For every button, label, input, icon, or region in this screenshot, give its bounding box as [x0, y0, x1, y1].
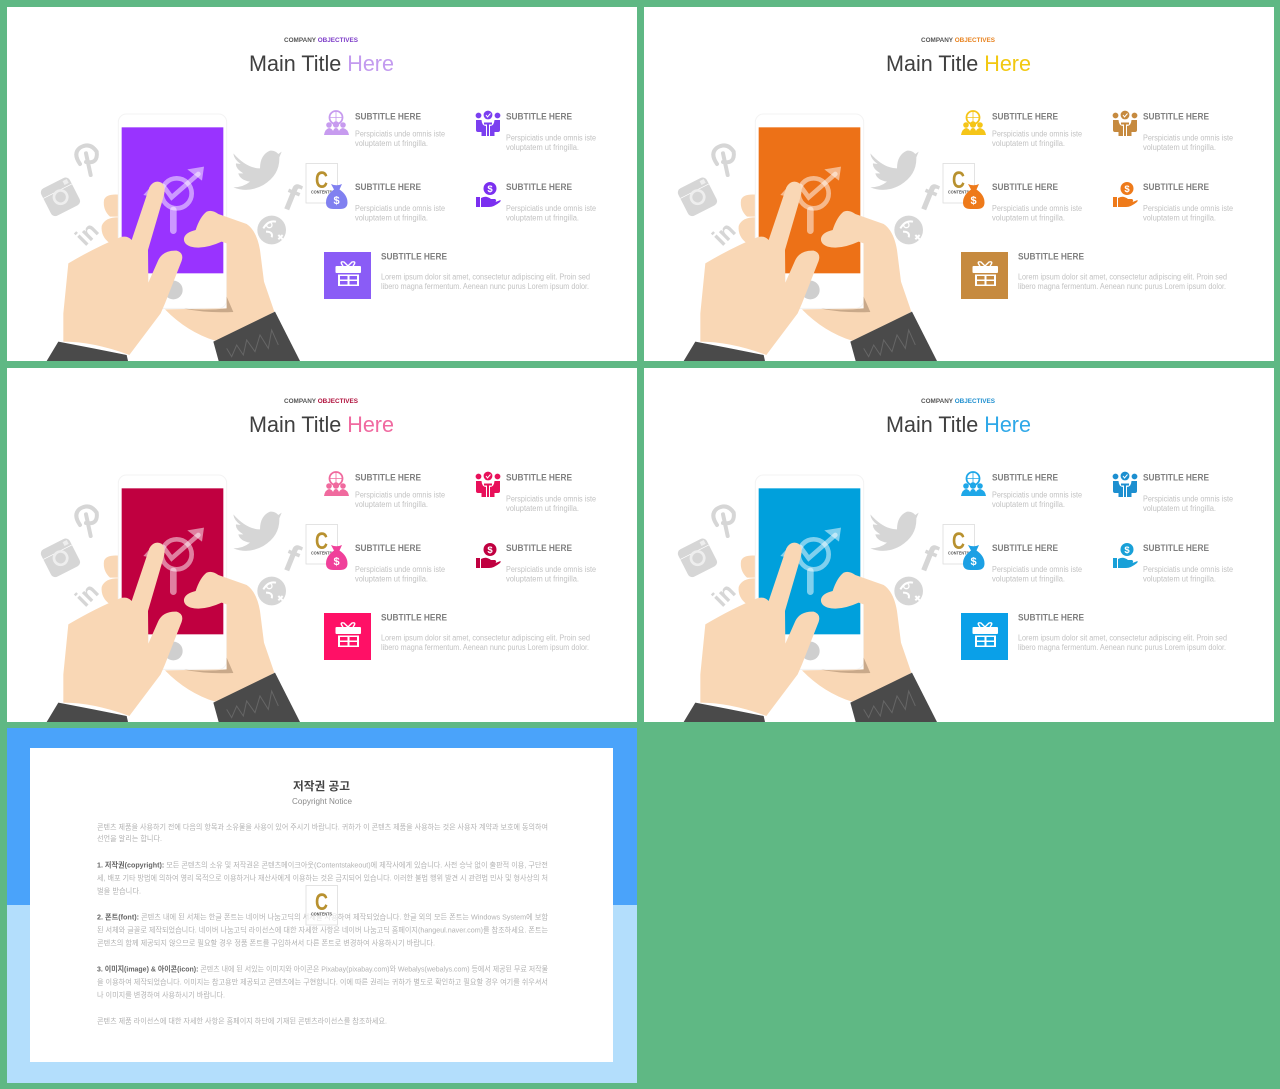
icon: linkedin: in	[70, 217, 104, 251]
logo watermark: CONTENTS	[311, 550, 332, 556]
subtitle item 4: Perspiciatis unde omnis iste	[1143, 204, 1233, 213]
subtitle item 4: voluptatem ut fringilla.	[1143, 574, 1216, 584]
icon: twitter	[233, 151, 282, 190]
icon: team	[1113, 111, 1137, 136]
icon: google plus	[894, 577, 923, 605]
text block: image and icon	[97, 964, 548, 1000]
subtitle item 2: Perspiciatis unde omnis iste	[506, 134, 596, 142]
icon: gift square	[961, 252, 1008, 299]
subtitle item 1: Perspiciatis unde omnis iste	[992, 490, 1082, 500]
subtitle item 5: Lorem ipsum dolor sit amet, consectetur adipiscing elit. Proin sed	[381, 272, 590, 282]
subtitle item 2: SUBTITLE HERE	[506, 112, 572, 122]
icon: gift square	[961, 613, 1008, 660]
icon: team	[476, 472, 500, 497]
icon: linkedin: in	[707, 217, 741, 251]
subtitle item 3: SUBTITLE HERE	[992, 182, 1058, 193]
subtitle item 5: libero magna fermentum. Aenean nunc purus Lorem ipsum dolor.	[381, 282, 589, 291]
heading: copyright notice korean: 저작권 공고	[293, 779, 350, 793]
logo watermark: C	[315, 889, 328, 916]
subtitle item 4: voluptatem ut fringilla.	[1143, 214, 1216, 222]
icon: linkedin: in	[70, 578, 104, 612]
icon: hand with coin	[476, 543, 501, 568]
subtitle item 1	[992, 472, 1082, 509]
icon: money bag: $	[333, 556, 340, 568]
subtitle item 3: Perspiciatis unde omnis iste	[992, 565, 1082, 574]
logo watermark: C	[315, 528, 328, 555]
subtitle item 3	[355, 182, 445, 222]
icon: pinterest	[76, 506, 97, 536]
icon: money bag: $	[333, 195, 340, 207]
subtitle item 5	[381, 612, 590, 652]
illustration: phone	[102, 114, 227, 308]
eyebrow: company objectives: COMPANY OBJECTIVES	[921, 398, 996, 405]
subtitle item 4: Perspiciatis unde omnis iste	[1143, 565, 1233, 574]
icon: money bag: $	[970, 556, 977, 568]
text block: font	[97, 912, 548, 948]
subtitle item 1: SUBTITLE HERE	[355, 472, 421, 484]
subtitle item 1	[992, 112, 1082, 148]
subtitle item 3: SUBTITLE HERE	[992, 543, 1058, 554]
icon: gift square	[324, 252, 371, 299]
subtitle item 2: Perspiciatis unde omnis iste	[506, 494, 596, 504]
illustration: phone	[102, 475, 227, 669]
text block: image and icon: 을 이용하여 제작되었습니다. 이미지는 참고용만 제공되고 콘텐츠에는 구현합니다. 이에 따른 권리는 귀하가 별도로 확인하고 필요할 경우 여기를 쉬우셔서	[97, 976, 548, 986]
subtitle item 1: Perspiciatis unde omnis iste	[355, 130, 445, 138]
subtitle item 5: Lorem ipsum dolor sit amet, consectetur adipiscing elit. Proin sed	[381, 634, 590, 642]
subtitle item 5	[1018, 252, 1227, 291]
icon: people globe	[961, 472, 986, 496]
subtitle item 5: Lorem ipsum dolor sit amet, consectetur adipiscing elit. Proin sed	[1018, 634, 1227, 642]
subtitle item 4	[1143, 543, 1234, 584]
subtitle item 4	[506, 543, 596, 584]
icon: facebook: f	[915, 537, 942, 581]
illustration: hands	[47, 543, 300, 722]
logo watermark	[306, 886, 338, 925]
logo watermark: CONTENTS	[311, 190, 332, 194]
subtitle item 5	[1018, 612, 1227, 652]
illustration: hands	[47, 182, 300, 361]
subtitle item 2: voluptatem ut fringilla.	[1143, 143, 1216, 152]
subtitle item 4: voluptatem ut fringilla.	[506, 574, 579, 584]
subtitle item 3: Perspiciatis unde omnis iste	[992, 204, 1082, 213]
subtitle item 1: SUBTITLE HERE	[992, 472, 1058, 484]
subtitle item 5: SUBTITLE HERE	[381, 252, 447, 262]
eyebrow: company objectives: COMPANY OBJECTIVES	[921, 37, 996, 44]
text block: intro: 콘텐츠 제품을 사용하기 전에 다음의 항목과 소유물을 사용이 있어 주시기 바랍니다. 귀하가 이 콘텐츠 제품을 사용하는 것은 사용자 계약과 보호에 동의하여	[97, 822, 548, 832]
eyebrow: company objectives: COMPANY OBJECTIVES	[284, 37, 359, 44]
subtitle item 3: voluptatem ut fringilla.	[355, 574, 428, 584]
icon: pinterest	[76, 145, 97, 175]
subtitle item 2: Perspiciatis unde omnis iste	[1143, 134, 1233, 142]
icon: hand with coin: $	[487, 184, 493, 195]
subtitle item 2: Perspiciatis unde omnis iste	[1143, 494, 1233, 504]
icon: hand with coin	[1113, 543, 1138, 568]
title: Main Title Here	[249, 51, 394, 76]
subtitle item 1: voluptatem ut fringilla.	[355, 500, 428, 509]
icon: instagram	[676, 176, 719, 218]
logo watermark: CONTENTS	[948, 550, 969, 556]
illustration: phone	[739, 114, 864, 308]
icon: people globe	[324, 472, 349, 496]
subtitle item 2	[506, 112, 596, 152]
icon: linkedin: in	[707, 578, 741, 612]
subtitle item 2	[1143, 112, 1234, 152]
text block: copyright: 세, 배포 기타 방법에 의하여 영리 목적으로 이용하거나 재산사에게 이용하는 것은 금지되어 있습니다. 이러한 불법 행위 발견 시 관련법 민사 및 형사상의 처	[97, 872, 548, 882]
panel: crimson slide	[7, 368, 637, 722]
icon: facebook: f	[278, 537, 305, 581]
text block: copyright	[97, 860, 548, 896]
subtitle item 2: SUBTITLE HERE	[1143, 112, 1209, 122]
subtitle item 2: SUBTITLE HERE	[1143, 472, 1209, 484]
title: Main Title Here	[249, 412, 394, 437]
subtitle item 4: SUBTITLE HERE	[506, 182, 572, 193]
subtitle item 5: Lorem ipsum dolor sit amet, consectetur adipiscing elit. Proin sed	[1018, 272, 1227, 282]
subtitle item 1: voluptatem ut fringilla.	[355, 139, 428, 148]
subtitle item 3	[992, 182, 1082, 222]
icon: facebook: f	[915, 176, 942, 220]
subtitle item 3: voluptatem ut fringilla.	[355, 214, 428, 222]
panel: blue slide	[644, 368, 1274, 722]
title: Main Title Here	[886, 412, 1031, 437]
subtitle item 5: libero magna fermentum. Aenean nunc purus Lorem ipsum dolor.	[381, 643, 589, 652]
icon: hand with coin: $	[1124, 545, 1130, 556]
icon: money bag	[326, 545, 348, 570]
subtitle item 5: libero magna fermentum. Aenean nunc purus Lorem ipsum dolor.	[1018, 282, 1226, 291]
subtitle item 1: SUBTITLE HERE	[355, 112, 421, 122]
text block: font: 2. 폰트(font): 콘텐츠 내에 된 서체는 한글 폰트는 네이버 나눔고딕의 서체를 사용하여 제작되었습니다. 한글 외의 모든 폰트는 Windows System에 보함	[97, 912, 548, 922]
icon: pinterest	[713, 145, 734, 175]
text block: image and icon: 나 이미지를 변경하여 사용하시기 바랍니다.	[97, 990, 225, 1000]
logo watermark	[306, 524, 338, 564]
subtitle item 1: SUBTITLE HERE	[992, 112, 1058, 122]
icon: people globe	[324, 111, 349, 135]
subtitle item 1: voluptatem ut fringilla.	[992, 139, 1065, 148]
icon: twitter	[233, 512, 282, 551]
subtitle item 2: voluptatem ut fringilla.	[1143, 504, 1216, 513]
icon: money bag	[963, 184, 984, 209]
icon: google plus	[257, 216, 286, 244]
subtitle item 2	[1143, 472, 1234, 513]
panel: copyright notice	[7, 728, 637, 1083]
subtitle item 1: Perspiciatis unde omnis iste	[992, 130, 1082, 138]
illustration: hands	[684, 543, 937, 722]
subheading: copyright notice: Copyright Notice	[292, 797, 353, 806]
subtitle item 3: SUBTITLE HERE	[355, 182, 421, 193]
text block: copyright: 벌을 받습니다.	[97, 886, 141, 896]
logo watermark	[306, 164, 338, 203]
icon: team	[1113, 472, 1137, 497]
subtitle item 3: Perspiciatis unde omnis iste	[355, 565, 445, 574]
icon: twitter	[870, 151, 919, 190]
icon: google plus	[894, 216, 923, 244]
subtitle item 4: voluptatem ut fringilla.	[506, 214, 579, 222]
subtitle item 4: SUBTITLE HERE	[506, 543, 572, 554]
subtitle item 5: SUBTITLE HERE	[1018, 612, 1084, 624]
subtitle item 3	[992, 543, 1082, 584]
icon: instagram	[676, 537, 719, 579]
subtitle item 2: voluptatem ut fringilla.	[506, 143, 579, 152]
subtitle item 2	[506, 472, 596, 513]
text block: image and icon: 3. 이미지(image) & 아이콘(icon): 콘텐츠 내에 된 서있는 이미지와 아이콘은 Pixabay(pixabay.com)와 Webalys(webalys.com) 등에서 제공된 무료 저작물	[97, 964, 548, 974]
icon: hand with coin: $	[487, 545, 493, 556]
icon: google plus	[257, 577, 286, 605]
subtitle item 3: voluptatem ut fringilla.	[992, 214, 1065, 222]
icon: hand with coin	[476, 182, 501, 207]
eyebrow: company objectives: COMPANY OBJECTIVES	[284, 398, 359, 405]
subtitle item 1: voluptatem ut fringilla.	[992, 500, 1065, 509]
illustration: hands	[684, 182, 937, 361]
subtitle item 5	[381, 252, 590, 291]
subtitle item 5: SUBTITLE HERE	[381, 612, 447, 624]
icon: money bag: $	[970, 195, 977, 207]
icon: instagram	[39, 537, 82, 579]
icon: people globe	[961, 111, 986, 135]
subtitle item 5: SUBTITLE HERE	[1018, 252, 1084, 262]
text block: copyright: 1. 저작권(copyright): 모든 콘텐츠의 소유 및 저작권은 콘텐츠메이크아웃(Contentstakeout)에 제작사에게 있습니다. 사전 승낙 없이 출판적 이용, 구단전	[97, 860, 548, 870]
icon: hand with coin: $	[1124, 184, 1130, 195]
panel: purple slide	[7, 7, 637, 361]
icon: twitter	[870, 512, 919, 551]
logo watermark	[943, 164, 974, 203]
subtitle item 1: Perspiciatis unde omnis iste	[355, 490, 445, 500]
logo watermark: CONTENTS	[311, 912, 332, 916]
icon: hand with coin	[1113, 182, 1138, 207]
subtitle item 4: Perspiciatis unde omnis iste	[506, 565, 596, 574]
subtitle item 1	[355, 112, 445, 148]
subtitle item 1	[355, 472, 445, 509]
subtitle item 4	[506, 182, 596, 222]
subtitle item 4	[1143, 182, 1234, 222]
subtitle item 4: SUBTITLE HERE	[1143, 182, 1209, 193]
subtitle item 2: SUBTITLE HERE	[506, 472, 572, 484]
logo watermark: C	[952, 528, 965, 555]
subtitle item 3: Perspiciatis unde omnis iste	[355, 204, 445, 213]
text block: font: 된 서체와 글꼴로 제작되었습니다. 네이버 나눔고딕 라이선스에 대한 자세한 사항은 네이버 나눔고딕 홈페이지(hangeul.naver.com)를 참조하세요. 폰트는	[97, 924, 548, 934]
icon: instagram	[39, 176, 82, 218]
text block: intro	[97, 822, 548, 843]
subtitle item 3	[355, 543, 445, 584]
icon: facebook: f	[278, 176, 305, 220]
subtitle item 5: libero magna fermentum. Aenean nunc purus Lorem ipsum dolor.	[1018, 643, 1226, 652]
text block: license note: 콘텐츠 제품 라이선스에 대한 자세한 사항은 홈페이지 하단에 기재된 콘텐츠라이선스를 참조하세요.	[97, 1016, 387, 1026]
text block: font: 콘텐츠의 함께 제공되지 않으므로 필요할 경우 정품 폰트를 구입하셔서 다른 폰트로 변경하여 사용하시기 바랍니다.	[97, 938, 435, 948]
icon: gift square	[324, 613, 371, 660]
title: Main Title Here	[886, 51, 1031, 76]
subtitle item 2: voluptatem ut fringilla.	[506, 504, 579, 513]
icon: pinterest	[713, 506, 734, 536]
logo watermark: C	[952, 167, 965, 194]
logo watermark: C	[315, 167, 328, 194]
text block: intro: 선언을 알리는 합니다.	[97, 833, 162, 843]
panel: orange slide	[644, 7, 1274, 361]
illustration: phone	[739, 475, 864, 669]
subtitle item 4: SUBTITLE HERE	[1143, 543, 1209, 554]
icon: money bag	[326, 184, 348, 209]
subtitle item 3: voluptatem ut fringilla.	[992, 574, 1065, 584]
logo watermark: CONTENTS	[948, 190, 969, 194]
subtitle item 4: Perspiciatis unde omnis iste	[506, 204, 596, 213]
logo watermark	[943, 524, 974, 564]
subtitle item 3: SUBTITLE HERE	[355, 543, 421, 554]
icon: team	[476, 111, 500, 136]
icon: money bag	[963, 545, 984, 570]
